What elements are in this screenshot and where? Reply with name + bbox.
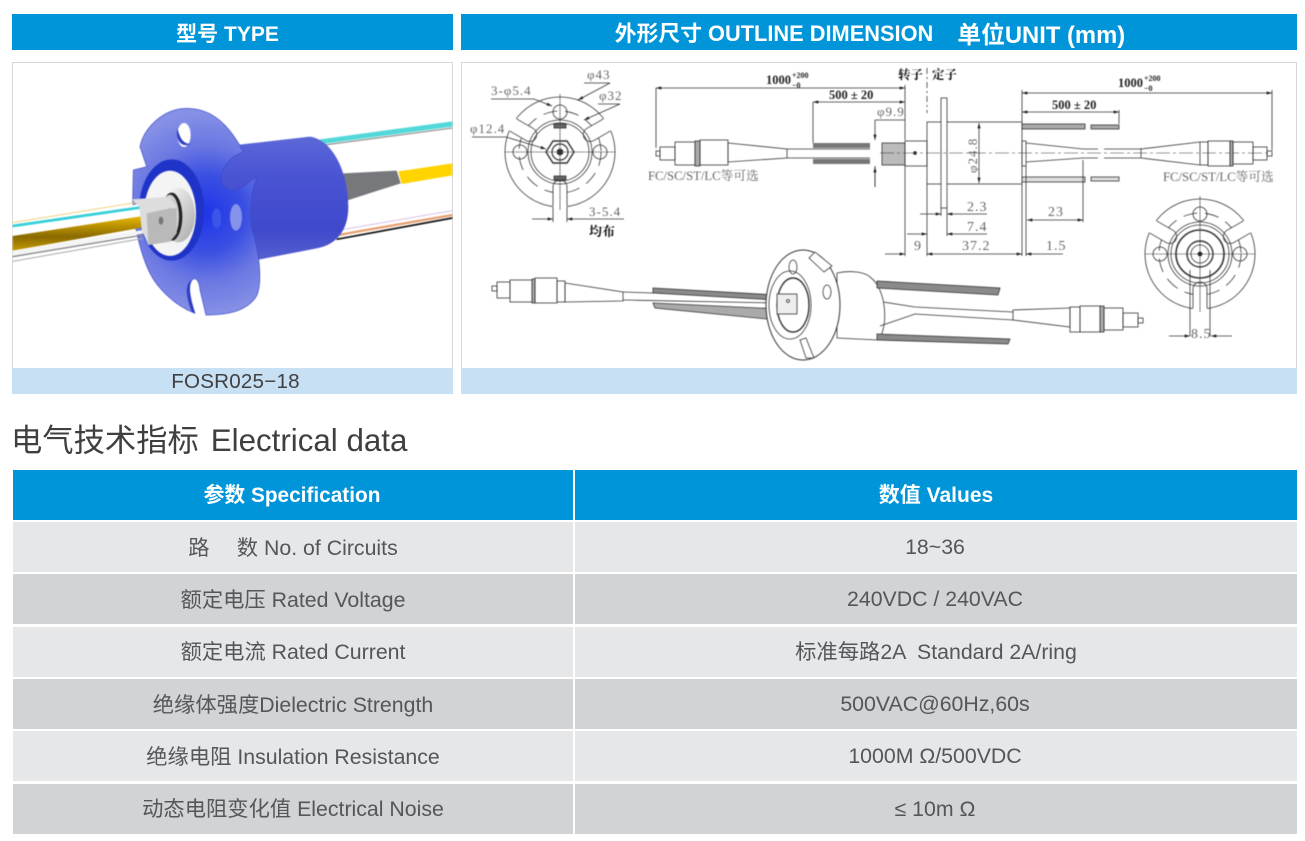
row 1 value: 18~36 [905, 534, 965, 558]
row 3 value [575, 627, 1297, 677]
end view right [1145, 196, 1255, 336]
table: electrical data [13, 470, 1297, 834]
dimension drawing [470, 67, 1274, 362]
shaft wires left [13, 201, 143, 261]
panel: dimension drawing [461, 62, 1297, 394]
dimension labels: 500 ± 20 [829, 88, 873, 102]
product illustration: slip ring [12, 107, 454, 316]
dimension labels: −0 [792, 81, 801, 90]
callouts on end view left: φ32 [599, 88, 623, 103]
dimension labels: FC/SC/ST/LC等可选 [648, 168, 759, 183]
caption: model number [12, 368, 453, 394]
row 5 spec [13, 731, 573, 781]
dimension labels: −0 [1144, 84, 1153, 93]
section title: 电气技术指标 Electrical data [11, 423, 407, 458]
rotor fibers [787, 143, 905, 165]
dimension labels [648, 67, 1274, 342]
dimension labels: 37.2 [962, 239, 990, 254]
dimension labels: 转子 [898, 67, 924, 82]
dimension lines [656, 85, 1272, 256]
row 6 value: ≤ 10m Ω [895, 796, 975, 820]
dimension labels: 1000 [766, 73, 791, 87]
row 5 value: 1000M Ω/500VDC [848, 744, 1022, 768]
dimension labels: φ9.9 [877, 104, 905, 119]
dimension labels: φ24.8 [965, 138, 980, 173]
dimension labels: 9 [914, 239, 922, 254]
row 1 spec: 路 数 No. of Circuits [188, 536, 398, 560]
cylinder body [207, 137, 348, 260]
dimension labels: 2.3 [967, 200, 988, 215]
bearing opening [139, 159, 204, 261]
row 4 spec: 绝缘体强度Dielectric Strength [153, 692, 433, 716]
dimension labels: +200 [792, 71, 809, 80]
caption: model number: FOSR025−18 [171, 370, 300, 393]
stator fibers and connector right [1022, 124, 1272, 182]
row 1 spec [13, 522, 573, 572]
dimension labels: 23 [1048, 205, 1064, 220]
header: specification [13, 470, 573, 520]
dimension labels: 8.5 [1191, 327, 1212, 342]
callouts on end view left: 3-φ5.4 [491, 83, 532, 98]
row 1 value [575, 522, 1297, 572]
wires right [320, 121, 452, 239]
header: specification: 参数 Specification [204, 484, 380, 507]
row 3 spec: 额定电流 Rated Current [181, 640, 405, 664]
row 5 value [575, 731, 1297, 781]
callouts on end view left [470, 67, 624, 239]
dimension labels: 7.4 [967, 220, 988, 235]
dimension 8.5 [1169, 335, 1190, 337]
end view left [505, 94, 615, 212]
panel: product photo [12, 62, 453, 394]
connector left [656, 140, 787, 166]
callouts on end view left: φ43 [587, 67, 611, 82]
heading bar: outline dimension: 单位UNIT (mm) [957, 22, 1125, 48]
row 4 spec [13, 679, 573, 729]
shaft end [132, 197, 177, 245]
heading bar: outline dimension [461, 14, 1297, 50]
callouts on end view left: 3-5.4 [589, 204, 621, 219]
row 4 value [575, 679, 1297, 729]
heading bar: outline dimension: 外形尺寸 OUTLINE DIMENSION [615, 20, 933, 46]
caption strip: drawing [461, 368, 1297, 394]
row 2 spec: 额定电压 Rated Voltage [181, 588, 405, 612]
row 3 spec [13, 627, 573, 677]
row 6 spec: 动态电阻变化值 Electrical Noise [142, 796, 444, 820]
callouts on end view left: φ12.4 [470, 121, 505, 136]
row 6 spec [13, 784, 573, 834]
dimension labels: 1000 [1118, 76, 1143, 90]
flange [133, 108, 260, 315]
heading bar: type: 型号 TYPE [176, 22, 279, 46]
side view body [880, 68, 1270, 208]
dimension labels: FC/SC/ST/LC等可选 [1163, 169, 1274, 184]
flange holes [177, 123, 242, 313]
header: values: 数值 Values [879, 484, 993, 506]
dimension labels: 1.5 [1046, 239, 1066, 254]
heading bar: type [12, 14, 453, 50]
row 5 spec: 绝缘电阻 Insulation Resistance [146, 744, 440, 768]
row 2 spec [13, 574, 573, 624]
row 2 value [575, 574, 1297, 624]
dimension 8.5 right arrow [1211, 335, 1232, 337]
isometric view [492, 250, 1143, 360]
dimension labels: 定子 [932, 68, 958, 82]
dimension labels: +200 [1144, 74, 1161, 83]
row 4 value: 500VAC@60Hz,60s [840, 692, 1030, 716]
row 6 value [575, 784, 1297, 834]
header: values [575, 470, 1297, 520]
dimension labels: 500 ± 20 [1052, 98, 1096, 112]
row 3 value: 标准每路2A Standard 2A/ring [795, 640, 1077, 664]
callouts on end view left: 均布 [589, 224, 615, 239]
row 2 value: 240VDC / 240VAC [847, 586, 1023, 610]
